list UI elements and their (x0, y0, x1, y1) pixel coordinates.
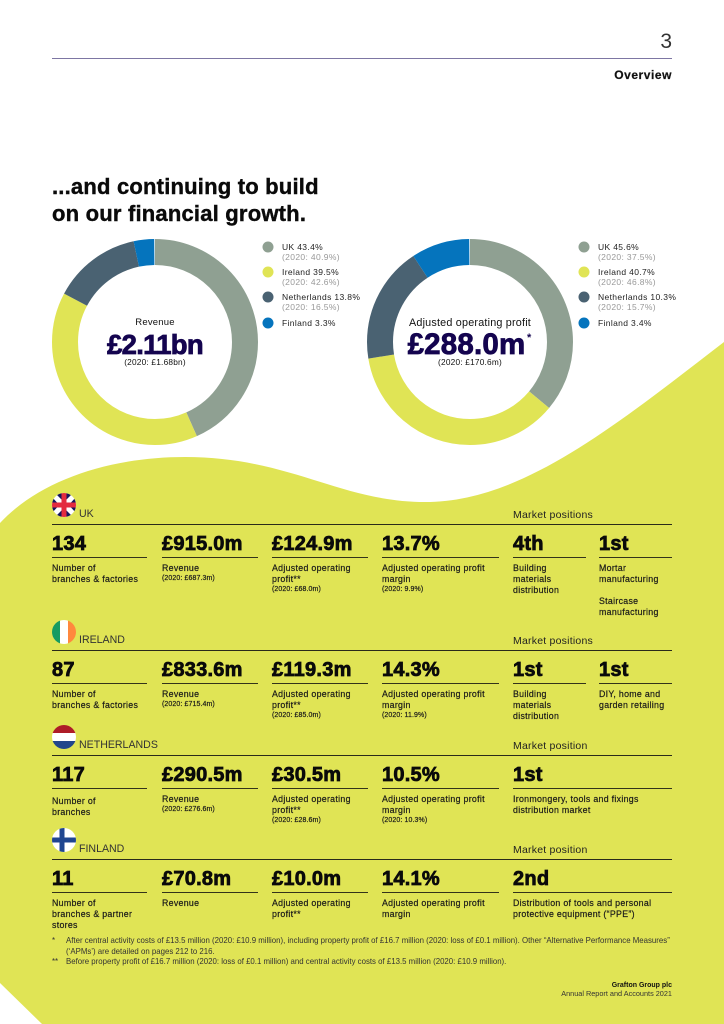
market position: DIY (599, 659, 672, 710)
stat: revenue (162, 659, 258, 708)
footnotes: * (52, 936, 55, 945)
stat: profit (272, 659, 368, 719)
stat: margin: 13.7% (382, 533, 440, 555)
stat: revenue: (2020: £687.3m) (162, 575, 215, 582)
legend: revenue: (2020: 40.9%) (282, 252, 340, 262)
legend: adjusted operating profit: Finland 3.4% (598, 318, 652, 328)
stat: revenue: (2020: £276.6m) (162, 806, 215, 813)
donut centre: adjusted operating profit: * (527, 332, 531, 344)
legend: revenue: Ireland 39.5% (282, 267, 339, 277)
stat: branches: 117 (52, 764, 85, 786)
legend: revenue: (2020: 42.6%) (282, 277, 340, 287)
stat: margin: Adjusted operating profit (382, 689, 485, 699)
stat: branches: branches & partner (52, 909, 132, 919)
stat: profit: profit** (272, 700, 301, 710)
stat: branches: stores (52, 920, 78, 930)
country name: FINLAND (79, 843, 124, 855)
stat: profit: (2020: £85.0m) (272, 712, 321, 719)
market position: mortar and staircase: 1st (599, 533, 629, 555)
stat: branches: 87 (52, 659, 75, 681)
stat: branches: 11 (52, 868, 74, 890)
donut centre: adjusted operating profit: (2020: £170.6m) (438, 357, 502, 367)
stat: margin: 14.1% (382, 868, 440, 890)
country name: UK (79, 508, 94, 520)
title (52, 174, 319, 226)
donut centre: adjusted operating profit (408, 317, 532, 367)
stat: branches: 134 (52, 533, 86, 555)
market position: ironmongery: Ironmongery, tools and fixings (513, 794, 639, 804)
stat: revenue: £915.0m (162, 533, 243, 555)
donut centre: adjusted operating profit: £288.0m (408, 328, 525, 361)
header rule (52, 58, 672, 59)
stat: margin (382, 659, 499, 719)
stat: margin: margin (382, 909, 411, 919)
stat: profit: Adjusted operating (272, 794, 351, 804)
market position: DIY: 1st (599, 659, 629, 681)
market position: building materials: distribution (513, 711, 559, 721)
legend: adjusted operating profit: UK 45.6% (598, 242, 639, 252)
stat: revenue: £70.8m (162, 868, 231, 890)
market position: tools and PPE (513, 868, 672, 920)
stat: margin (382, 764, 499, 824)
donut centre: revenue (106, 317, 203, 367)
market position: building materials: Building (513, 563, 547, 573)
stat: profit: £119.3m (272, 659, 352, 681)
stat: margin (382, 533, 499, 593)
stat: branches: Number of (52, 563, 96, 573)
stat: profit (272, 764, 368, 824)
stat: margin: margin (382, 574, 411, 584)
market position: tools and PPE: Distribution of tools and personal (513, 898, 651, 908)
market position: DIY: garden retailing (599, 700, 664, 710)
legend: revenue: Netherlands 13.8% (282, 292, 360, 302)
stat: branches: Number of (52, 796, 96, 806)
market heading: Market positions (513, 634, 593, 646)
market position: building materials: 4th (513, 533, 544, 555)
icon: UK flag (52, 493, 76, 517)
section label: Overview (614, 68, 672, 82)
market position: mortar and staircase: manufacturing (599, 607, 659, 617)
stat: branches: branches (52, 807, 91, 817)
stat: profit: profit** (272, 909, 301, 919)
stat: margin: 14.3% (382, 659, 440, 681)
stat: profit (272, 533, 368, 593)
market position: mortar and staircase: Mortar (599, 563, 626, 573)
market position: building materials: materials (513, 700, 551, 710)
legend: revenue (262, 242, 360, 328)
stat: branches (52, 764, 147, 817)
stat: margin: Adjusted operating profit (382, 563, 485, 573)
icon: Finland flag (52, 828, 76, 852)
stat: branches (52, 533, 147, 584)
footer: company and report (561, 982, 672, 998)
stat: profit: £30.5m (272, 764, 341, 786)
stat: revenue: Revenue (162, 563, 199, 573)
stat: profit: £10.0m (272, 868, 341, 890)
stat: profit: (2020: £28.6m) (272, 817, 321, 824)
legend: revenue: (2020: 16.5%) (282, 302, 340, 312)
legend: adjusted operating profit: (2020: 46.8%) (598, 277, 656, 287)
stat: margin: margin (382, 700, 411, 710)
stat: profit: profit** (272, 805, 301, 815)
legend: adjusted operating profit: (2020: 15.7%) (598, 302, 656, 312)
market position: building materials: materials (513, 574, 551, 584)
stat: revenue: Revenue (162, 689, 199, 699)
stat: profit: £124.9m (272, 533, 353, 555)
icon: Ireland flag (52, 620, 76, 644)
stat: branches: branches & factories (52, 700, 138, 710)
footnotes (52, 936, 670, 966)
panel: Netherlands (52, 725, 672, 824)
stat: profit (272, 868, 368, 920)
donut centre: revenue: Revenue (135, 317, 175, 328)
stat: branches: Number of (52, 689, 96, 699)
footnotes: (‘APMs’) are detailed on pages 212 to 216. (66, 947, 215, 956)
market heading: Market positions (513, 508, 593, 520)
stat: margin: (2020: 10.3%) (382, 817, 427, 824)
country name: IRELAND (79, 634, 125, 646)
stat: revenue: £290.5m (162, 764, 243, 786)
market position: ironmongery: 1st (513, 764, 543, 786)
stat: profit: Adjusted operating (272, 898, 351, 908)
panel: Ireland (52, 620, 672, 721)
stat: branches: branches & factories (52, 574, 138, 584)
donut centre: adjusted operating profit: Adjusted operating profit (409, 317, 531, 329)
market position: DIY: DIY, home and (599, 689, 660, 699)
stat: margin: Adjusted operating profit (382, 794, 485, 804)
stat: revenue: Revenue (162, 898, 199, 908)
legend: adjusted operating profit: (2020: 37.5%) (598, 252, 656, 262)
footer: company and report: Annual Report and Accounts 2021 (561, 989, 672, 998)
donut centre: revenue: (2020: £1.68bn) (124, 357, 186, 367)
market heading: Market position (513, 844, 588, 856)
stat: revenue: £833.6m (162, 659, 243, 681)
stat: revenue: (2020: £715.4m) (162, 701, 215, 708)
country name: NETHERLANDS (79, 739, 158, 751)
stat: profit: (2020: £68.0m) (272, 586, 321, 593)
stat: profit: profit** (272, 574, 301, 584)
stat: revenue (162, 868, 258, 908)
market position: tools and PPE: protective equipment (“PPE”) (513, 909, 635, 919)
stat: margin: (2020: 9.9%) (382, 586, 423, 593)
stat: revenue (162, 764, 258, 813)
title: on our financial growth. (52, 201, 306, 226)
stat: revenue: Revenue (162, 794, 199, 804)
stat: branches (52, 868, 147, 930)
footer: company and report: Grafton Group plc (612, 982, 672, 989)
market position: ironmongery: distribution market (513, 805, 591, 815)
market position: building materials: Building (513, 689, 547, 699)
panel: Finland (52, 828, 672, 930)
stat: margin: margin (382, 805, 411, 815)
legend: adjusted operating profit: Netherlands 10.3% (598, 292, 676, 302)
market position: building materials: 1st (513, 659, 543, 681)
legend: revenue: UK 43.4% (282, 242, 323, 252)
stat: margin (382, 868, 499, 920)
market heading: Market position (513, 740, 588, 752)
footnotes: ** (52, 957, 58, 966)
stat: branches: Number of (52, 898, 96, 908)
stat: margin: (2020: 11.9%) (382, 712, 427, 719)
title: ...and continuing to build (52, 174, 319, 199)
stat: profit: Adjusted operating (272, 689, 351, 699)
icon: Netherlands flag (52, 725, 76, 749)
market position: mortar and staircase (599, 533, 672, 618)
legend: adjusted operating profit: Ireland 40.7% (598, 267, 655, 277)
market position: building materials (512, 533, 586, 595)
panel: UK (52, 493, 672, 618)
stat: margin: Adjusted operating profit (382, 898, 485, 908)
legend: revenue: Finland 3.3% (282, 318, 336, 328)
donut centre: revenue: £2.11bn (107, 329, 203, 360)
stat: margin: 10.5% (382, 764, 440, 786)
stat: branches (52, 659, 147, 710)
market position: mortar and staircase: manufacturing (599, 574, 659, 584)
market position: tools and PPE: 2nd (513, 868, 549, 890)
market position: mortar and staircase: Staircase (599, 596, 638, 606)
legend: adjusted operating profit (578, 242, 676, 328)
footnotes: After central activity costs of £13.5 million (2020: £10.9 million), including property profit of £16.7 million (2020: loss of £0.1 million). Other “Alternative Performance Measures” (66, 936, 670, 945)
stat: revenue (162, 533, 258, 582)
page number: 3 (660, 30, 672, 53)
market position: building materials (513, 659, 586, 721)
stat: profit: Adjusted operating (272, 563, 351, 573)
market position: building materials: distribution (513, 585, 559, 595)
market position: ironmongery (513, 764, 672, 815)
footnotes: Before property profit of £16.7 million (2020: loss of £0.1 million) and central activity costs of £13.5 million (2020: £10.9 million). (66, 957, 506, 966)
